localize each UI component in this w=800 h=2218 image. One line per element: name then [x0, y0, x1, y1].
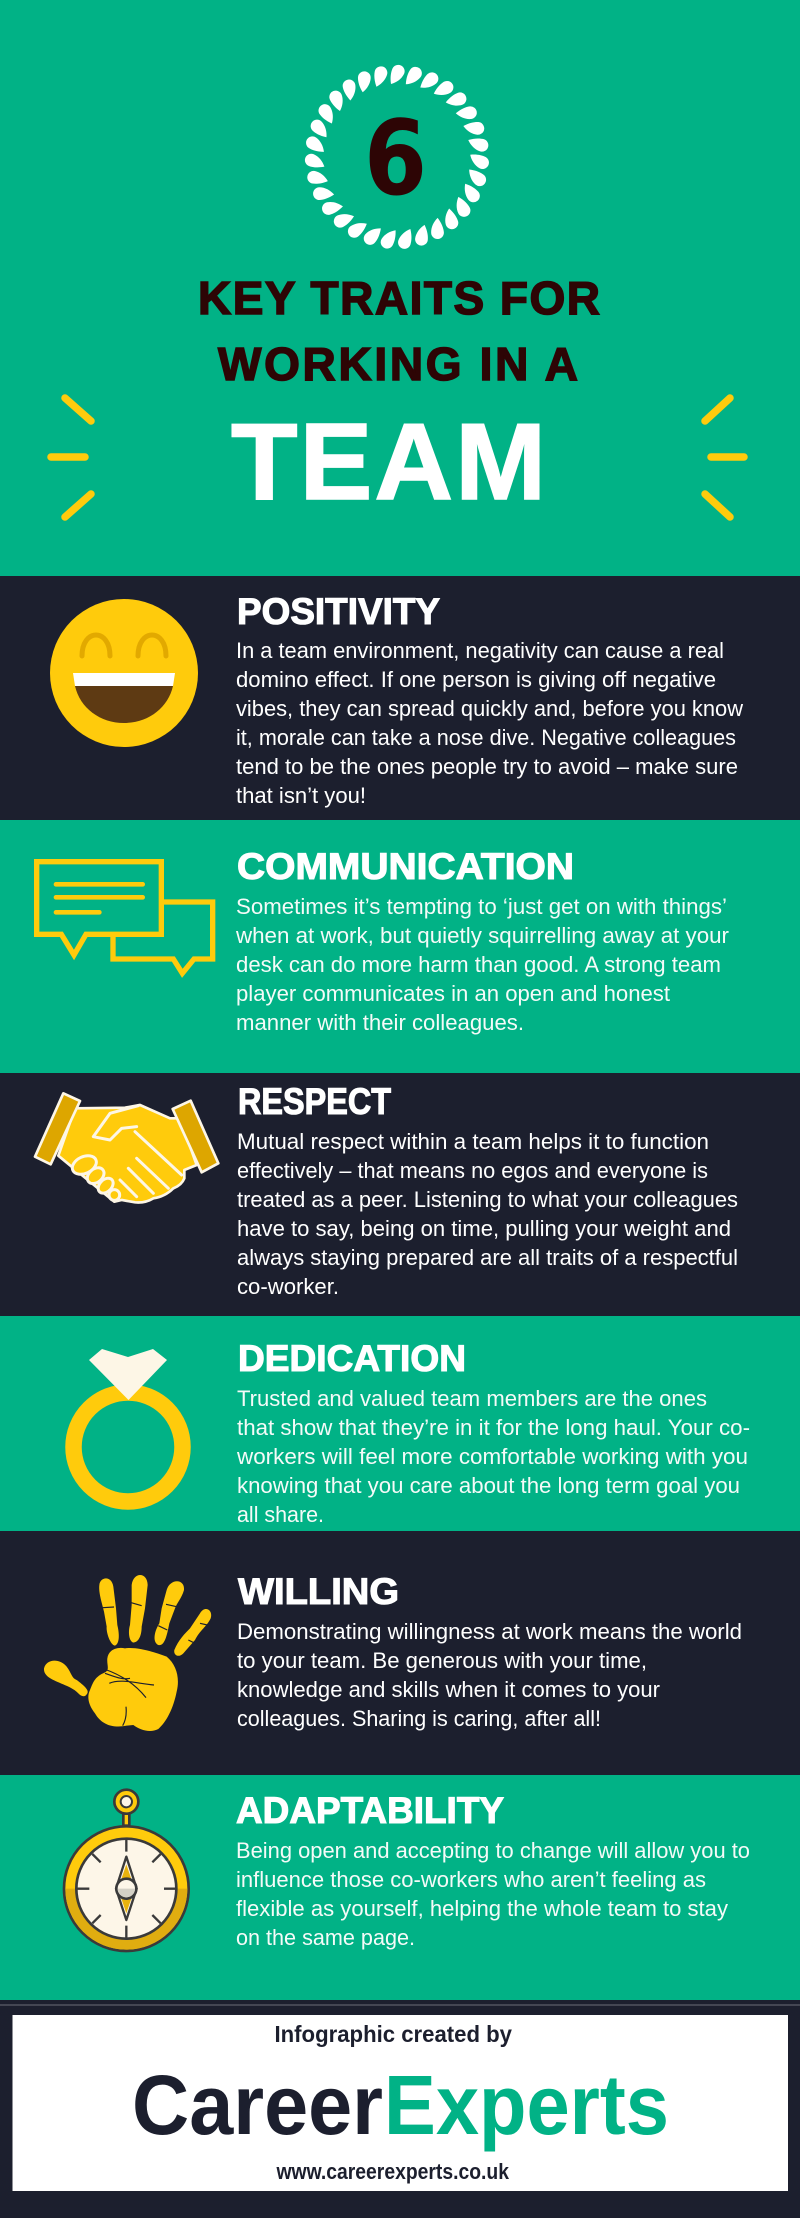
icon: handprint — [44, 1575, 211, 1731]
text: website: www.careerexperts.co.uk — [276, 2159, 510, 2184]
icon: right sparkle rays — [705, 398, 744, 517]
text: dedication body: Trusted and valued team members are the ones — [237, 1386, 707, 1411]
text: positivity body: In a team environment, negativity can cause a real — [236, 638, 724, 663]
text: dedication body: that show that they’re in it for the long haul. Your co- — [237, 1415, 750, 1440]
panel: header — [0, 0, 800, 576]
panel: dedication — [0, 1316, 800, 1531]
text: respect body: co-worker. — [237, 1274, 339, 1299]
icon: handshake — [35, 1093, 218, 1202]
text: adaptability body: on the same page. — [236, 1925, 415, 1950]
text: communication body — [235, 894, 729, 1035]
panel: adaptability — [0, 1775, 800, 2000]
text: positivity body: that isn’t you! — [236, 783, 366, 808]
icon: ring of white teardrops — [305, 65, 489, 249]
logo: career experts — [132, 2058, 669, 2152]
title line 1: KEY TRAITS FOR — [198, 272, 600, 324]
icon: compass — [64, 1790, 189, 1951]
text: communication body: desk can do more harm than good. A strong team — [236, 952, 721, 977]
text: positivity body: vibes, they can spread quickly and, before you know — [236, 696, 744, 721]
text: willing body: colleagues. Sharing is caring, after all! — [237, 1706, 601, 1731]
heading: willing: WILLING — [238, 1571, 399, 1612]
title line 2: WORKING IN A — [218, 338, 578, 390]
heading: positivity: POSITIVITY — [237, 591, 440, 632]
icon: speech bubbles — [37, 862, 213, 973]
text: respect body — [237, 1129, 738, 1299]
text: adaptability body: flexible as yourself, helping the whole team to stay — [236, 1896, 729, 1921]
heading: dedication: DEDICATION — [238, 1338, 466, 1379]
text: respect body: treated as a peer. Listening to what your colleagues — [237, 1187, 738, 1212]
text: willing body — [237, 1619, 742, 1731]
text: communication body: manner with their colleagues. — [236, 1010, 524, 1035]
text: willing body: to your team. Be generous with your time, — [237, 1648, 647, 1673]
title line 3: TEAM: TEAM — [231, 401, 546, 523]
text: respect body: Mutual respect within a team helps it to function — [237, 1129, 709, 1154]
panel: respect — [0, 1073, 800, 1316]
text: willing body: Demonstrating willingness at work means the world — [237, 1619, 742, 1644]
panel: footer credit — [12, 2015, 788, 2191]
panel: willing — [0, 1531, 800, 1775]
icon: diamond ring — [74, 1349, 182, 1502]
text: respect body: effectively – that means no egos and everyone is — [237, 1158, 708, 1183]
text: respect body: have to say, being on time, pulling your weight and — [237, 1216, 731, 1241]
logo: career experts: Career — [132, 2058, 383, 2152]
text: positivity body: it, morale can take a nose dive. Negative colleagues — [236, 725, 736, 750]
heading: communication: COMMUNICATION — [237, 846, 574, 887]
logo: career experts: Experts — [384, 2058, 669, 2152]
text: dedication body: knowing that you care about the long term goal you — [237, 1473, 740, 1498]
text: respect body: always staying prepared are all traits of a respectful — [237, 1245, 738, 1270]
icon: laughing smiley — [50, 599, 198, 747]
icon: left sparkle rays — [51, 398, 91, 517]
text: dedication body: all share. — [237, 1502, 324, 1527]
text: infographic created by: Infographic created by — [274, 2021, 512, 2047]
text: positivity body — [236, 638, 744, 808]
text: communication body: player communicates in an open and honest — [236, 981, 671, 1006]
numeral 6: 6 — [364, 99, 427, 219]
panel: communication — [0, 820, 800, 1073]
text: adaptability body: Being open and accepting to change will allow you to — [236, 1838, 750, 1863]
text: communication body: Sometimes it’s tempting to ‘just get on with things’ — [236, 894, 727, 919]
heading: respect: RESPECT — [238, 1081, 391, 1122]
text: dedication body — [236, 1386, 750, 1527]
text: dedication body: workers will feel more comfortable working with you — [236, 1444, 748, 1469]
panel: positivity — [0, 576, 800, 820]
text: willing body: knowledge and skills when it comes to your — [237, 1677, 660, 1702]
text: adaptability body — [236, 1838, 750, 1950]
text: adaptability body: influence those co-workers who aren’t feeling as — [236, 1867, 706, 1892]
text: positivity body: tend to be the ones people try to avoid – make sure — [236, 754, 738, 779]
text: communication body: when at work, but quietly squirrelling away at your — [235, 923, 729, 948]
text: positivity body: domino effect. If one person is giving off negative — [236, 667, 716, 692]
heading: adaptability: ADAPTABILITY — [236, 1790, 504, 1831]
